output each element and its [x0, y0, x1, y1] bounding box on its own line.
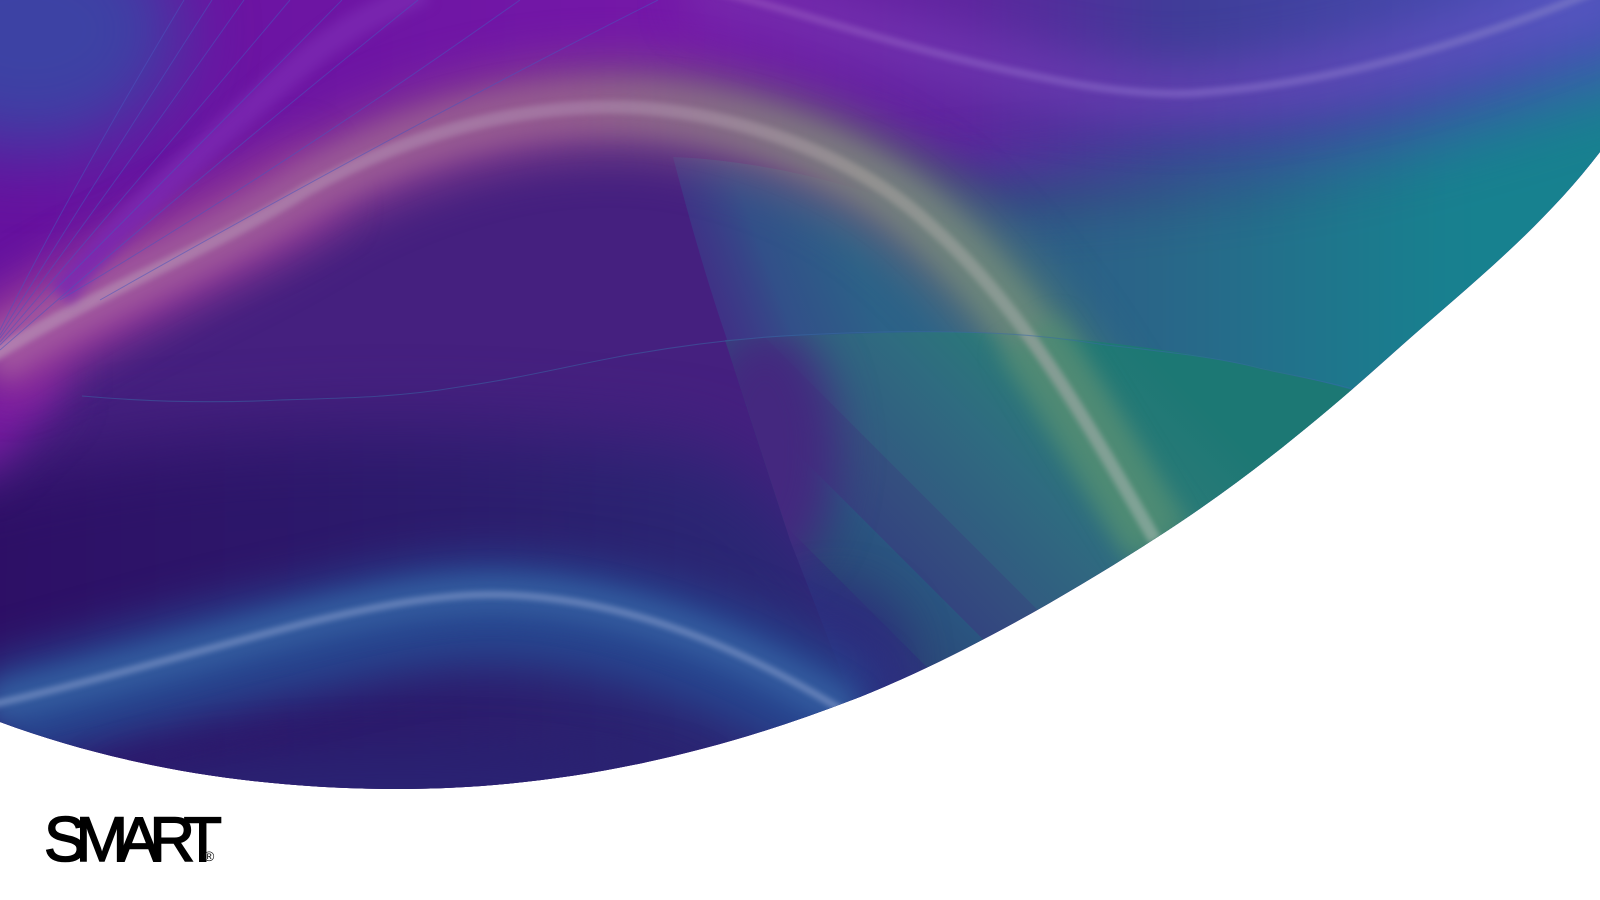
- top purple to blue field: [0, 0, 1600, 305]
- thin arc line: [82, 332, 1356, 402]
- blue ribbon glow: [0, 595, 850, 715]
- left purple light band: [60, 0, 425, 295]
- left edge purple glow: [0, 345, 60, 480]
- fan of thin lines: [0, 0, 658, 350]
- logo: SMART: SMART: [44, 805, 222, 875]
- pink ribbon core: [0, 107, 1155, 540]
- wedge above the arc: [673, 157, 959, 340]
- top-left blue corner glow: [0, 0, 180, 150]
- blue ribbon wide glow: [0, 611, 850, 725]
- wide pink ribbon glow: [0, 107, 1155, 540]
- purple shade of the bands: [726, 335, 855, 562]
- banded region beneath the arc: [725, 332, 1352, 700]
- lower dark navy field: [0, 412, 920, 789]
- lower-left shade of the bands: [844, 584, 913, 700]
- green lower ribbon glow: [1030, 335, 1165, 550]
- upper ribbon glow: [690, 0, 1600, 94]
- bottom navy shade: [127, 758, 666, 789]
- blue ribbon core: [0, 595, 850, 715]
- teal right field: [939, 44, 1600, 573]
- upper ribbon core: [690, 0, 1600, 94]
- left pink ribbon extra glow: [92, 190, 217, 350]
- registered mark: ®: [204, 848, 215, 864]
- medium pink ribbon glow: [0, 107, 1155, 540]
